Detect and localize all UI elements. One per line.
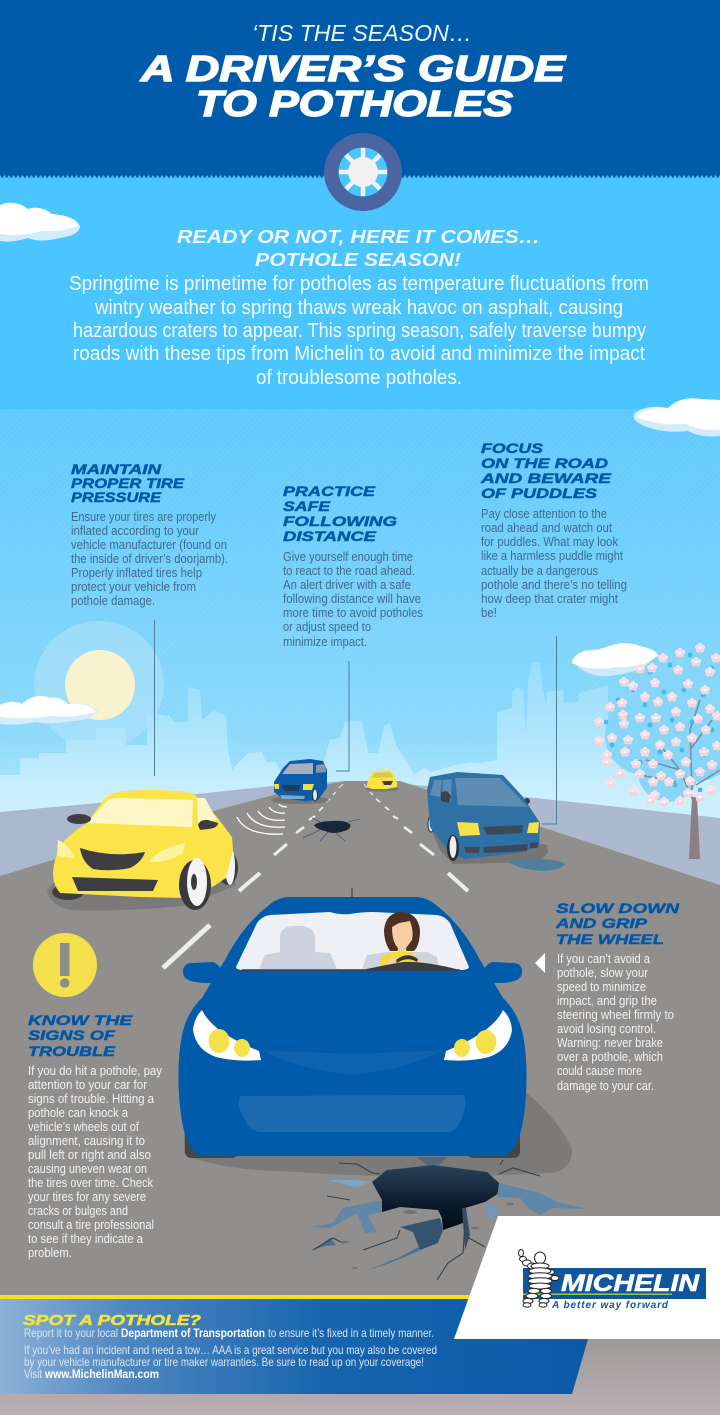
tip: following distance: or adjust speed to [283,619,371,634]
tip: signs of trouble: the tires over time. Check [28,1175,153,1190]
windshield [236,912,469,970]
small yellow car [365,770,399,792]
slow-down arrow [535,953,545,973]
intro sky panel [0,175,720,409]
left headlight [193,1010,261,1061]
footer text: to ensure it’s fixed in a timely manner. [268,1326,434,1340]
Michelin man [518,1250,559,1307]
tip: signs of trouble: alignment, causing it to [28,1133,145,1148]
big pothole [310,1157,587,1280]
tip: signs of trouble: KNOW THE [28,1012,133,1028]
tip: slow down: avoid losing control. [557,1021,656,1036]
tip: slow down: damage to your car. [557,1078,654,1093]
tip: tire pressure: the inside of driver’s doorjamb). [71,551,228,566]
tree foliage [605,652,720,802]
dashboard [362,962,460,970]
tip: signs of trouble: cracks or bulges and [28,1203,128,1218]
footer band [0,1299,588,1394]
signal waves [237,804,287,834]
tyres [185,1120,238,1158]
tip: signs of trouble: your tires for any severe [28,1189,146,1204]
pointer line: following distance [336,661,349,771]
tip: following distance: SAFE [283,498,331,514]
tip: puddles: ON THE ROAD [481,455,608,471]
footer text: www.MichelinMan.com [44,1367,159,1381]
title: A DRIVER’S GUIDE [140,48,566,89]
tip: tire pressure: protect your vehicle from [71,579,196,594]
antenna [351,888,353,897]
tip: signs of trouble: causing uneven wear on [28,1161,147,1176]
intro paragraph: of troublesome potholes. [256,367,462,389]
subheading [177,226,540,270]
car body [178,897,527,1156]
intro paragraph: hazardous craters to appear. This spring season, safely traverse bumpy [73,320,646,342]
tip: slow down: steering wheel firmly to [557,1007,674,1022]
tip: slow down: THE WHEEL [556,931,664,947]
tip: tire pressure: pothole damage. [71,593,155,608]
tip: following distance: PRACTICE [283,483,376,499]
blossom flowers [594,643,720,807]
big car shadow [184,1088,572,1176]
title: TO POTHOLES [196,83,513,124]
tip: tire pressure: MAINTAIN [71,461,162,477]
cloud top left [0,203,80,242]
skyline [0,662,720,830]
tip: puddles: for puddles. What may look [481,534,618,549]
tip: signs of trouble: signs of trouble. Hitting a [28,1091,155,1106]
cloud near sun [0,696,98,725]
pointer line: tire pressure [154,620,156,776]
grille [239,1095,465,1132]
tree blossoms [594,643,720,859]
tip: puddles: pothole and there’s no telling [481,577,627,592]
tip: following distance: Give yourself enough time [283,549,413,564]
tip: slow down: AND GRIP [555,915,648,931]
tip: puddles: FOCUS [481,440,544,456]
road surface [0,781,720,1415]
tip: signs of trouble: to see if they indicate a [28,1231,144,1246]
tip: following distance: more time to avoid potholes [283,605,423,620]
footer text: Department of Transportation [121,1326,265,1340]
tip: puddles: like a harmless puddle might [481,548,623,563]
tip: slow down: speed to minimize [557,979,646,994]
tip: following distance: DISTANCE [283,528,377,544]
cloud top right [634,398,720,436]
intro paragraph: Springtime is primetime for potholes as temperature fluctuations from [69,273,649,295]
footer text [23,1313,437,1381]
Michelin logo [518,1250,706,1311]
big blue car [178,888,527,1158]
passenger seat [259,926,337,969]
puddle [507,859,565,871]
tip: puddles: AND BEWARE [480,470,612,486]
tip: slow down: over a pothole, which [557,1049,663,1064]
tip: signs of trouble: TROUBLE [28,1043,116,1059]
car shadow [47,870,236,910]
tip: puddles: how deep that crater might [481,591,618,606]
logo panel [454,1216,720,1339]
tip: slow down: If you can’t avoid a [557,951,651,966]
tip: tire pressure [71,461,228,608]
tip: signs of trouble: SIGNS OF [28,1027,116,1043]
icon: wheel [324,133,402,211]
intro paragraph: roads with these tips from Michelin to avoid and minimize the impact [73,343,645,365]
crater [372,1165,499,1230]
tip: following distance: following distance will have [283,591,421,606]
mirrors [183,962,222,983]
driver [380,912,426,968]
tip: signs of trouble: If you do hit a pothole, pay [28,1063,162,1078]
yellow car [47,790,238,910]
footer text: Report it to your local [24,1326,118,1340]
tip: tire pressure: Ensure your tires are properly [71,509,216,524]
tip: puddles: road ahead and watch out [481,520,612,535]
tip: tire pressure: PROPER TIRE [71,475,185,491]
lane markings [163,784,468,968]
tip: signs of trouble [28,1012,162,1260]
subheading: READY OR NOT, HERE IT COMES… [177,226,540,247]
footer text: SPOT A POTHOLE? [23,1313,201,1329]
tip: slow down [555,900,680,1093]
crater shards [310,1180,587,1270]
tip: signs of trouble: vehicle’s wheels out of [28,1119,139,1134]
right roadside bank [398,783,720,886]
driver seat [362,952,439,969]
pointer line: puddles [542,636,556,824]
sky background [0,409,720,829]
tip: signs of trouble: consult a tire professional [28,1217,154,1232]
tip: puddles: OF PUDDLES [481,485,598,501]
yellow footer rule [0,1295,470,1299]
intro paragraph: wintry weather to spring thaws wreak havoc on asphalt, causing [94,297,623,319]
left roadside bank [0,781,345,878]
tip: following distance [283,483,423,649]
zigzag header edge [0,174,720,178]
hood crease [262,1050,443,1075]
tip: puddles: Pay close attention to the [481,506,607,521]
warning icon [33,933,97,997]
right headlight [444,1010,512,1061]
tip: following distance: FOLLOWING [283,513,397,529]
Michelin logo: MICHELIN [561,1270,700,1297]
crater cracks [313,1160,540,1280]
cloud by tree [572,643,660,676]
footer text: by your vehicle manufacturer or tire maker warranties. Be sure to read up on your coverage! [24,1355,424,1369]
tip: slow down: SLOW DOWN [556,900,680,916]
tip: signs of trouble: pull left or right and also [28,1147,151,1162]
small pothole [303,818,360,841]
kicker: ‘TIS THE SEASON… [252,20,472,46]
header band [0,0,720,175]
tip: signs of trouble: attention to your car for [28,1077,148,1092]
tip: puddles: be! [481,605,497,620]
tip: puddles [480,440,627,620]
tip: following distance: minimize impact. [283,634,367,649]
footer text: If you’ve had an incident and need a tow… AAA is a great service but you may also be covered [24,1343,437,1357]
tip: puddles: actually be a dangerous [481,563,598,578]
sun [34,621,164,749]
tip: signs of trouble: pothole can knock a [28,1105,129,1120]
footer text: Visit [24,1367,43,1381]
tip: following distance: An alert driver with a safe [283,577,411,592]
small blue van [271,759,329,804]
tip: slow down: impact, and grip the [557,993,657,1008]
tip: slow down: could cause more [557,1063,642,1078]
tip: signs of trouble: problem. [28,1245,72,1260]
tip: tire pressure: Properly inflated tires help [71,565,202,580]
tip: slow down: Warning: never brake [557,1035,663,1050]
tip: slow down: pothole, slow your [557,965,649,980]
tip: following distance: to react to the road ahead. [283,563,415,578]
van shadow [430,827,548,864]
tip: tire pressure: PRESSURE [71,489,162,505]
Michelin logo: A better way forward [551,1300,669,1311]
intro paragraph [69,273,649,389]
tip: tire pressure: inflated according to your [71,523,200,538]
subheading: POTHOLE SEASON! [255,249,461,270]
tip: tire pressure: vehicle manufacturer (found on [71,537,227,552]
title [140,48,566,124]
large blue van [427,772,565,871]
